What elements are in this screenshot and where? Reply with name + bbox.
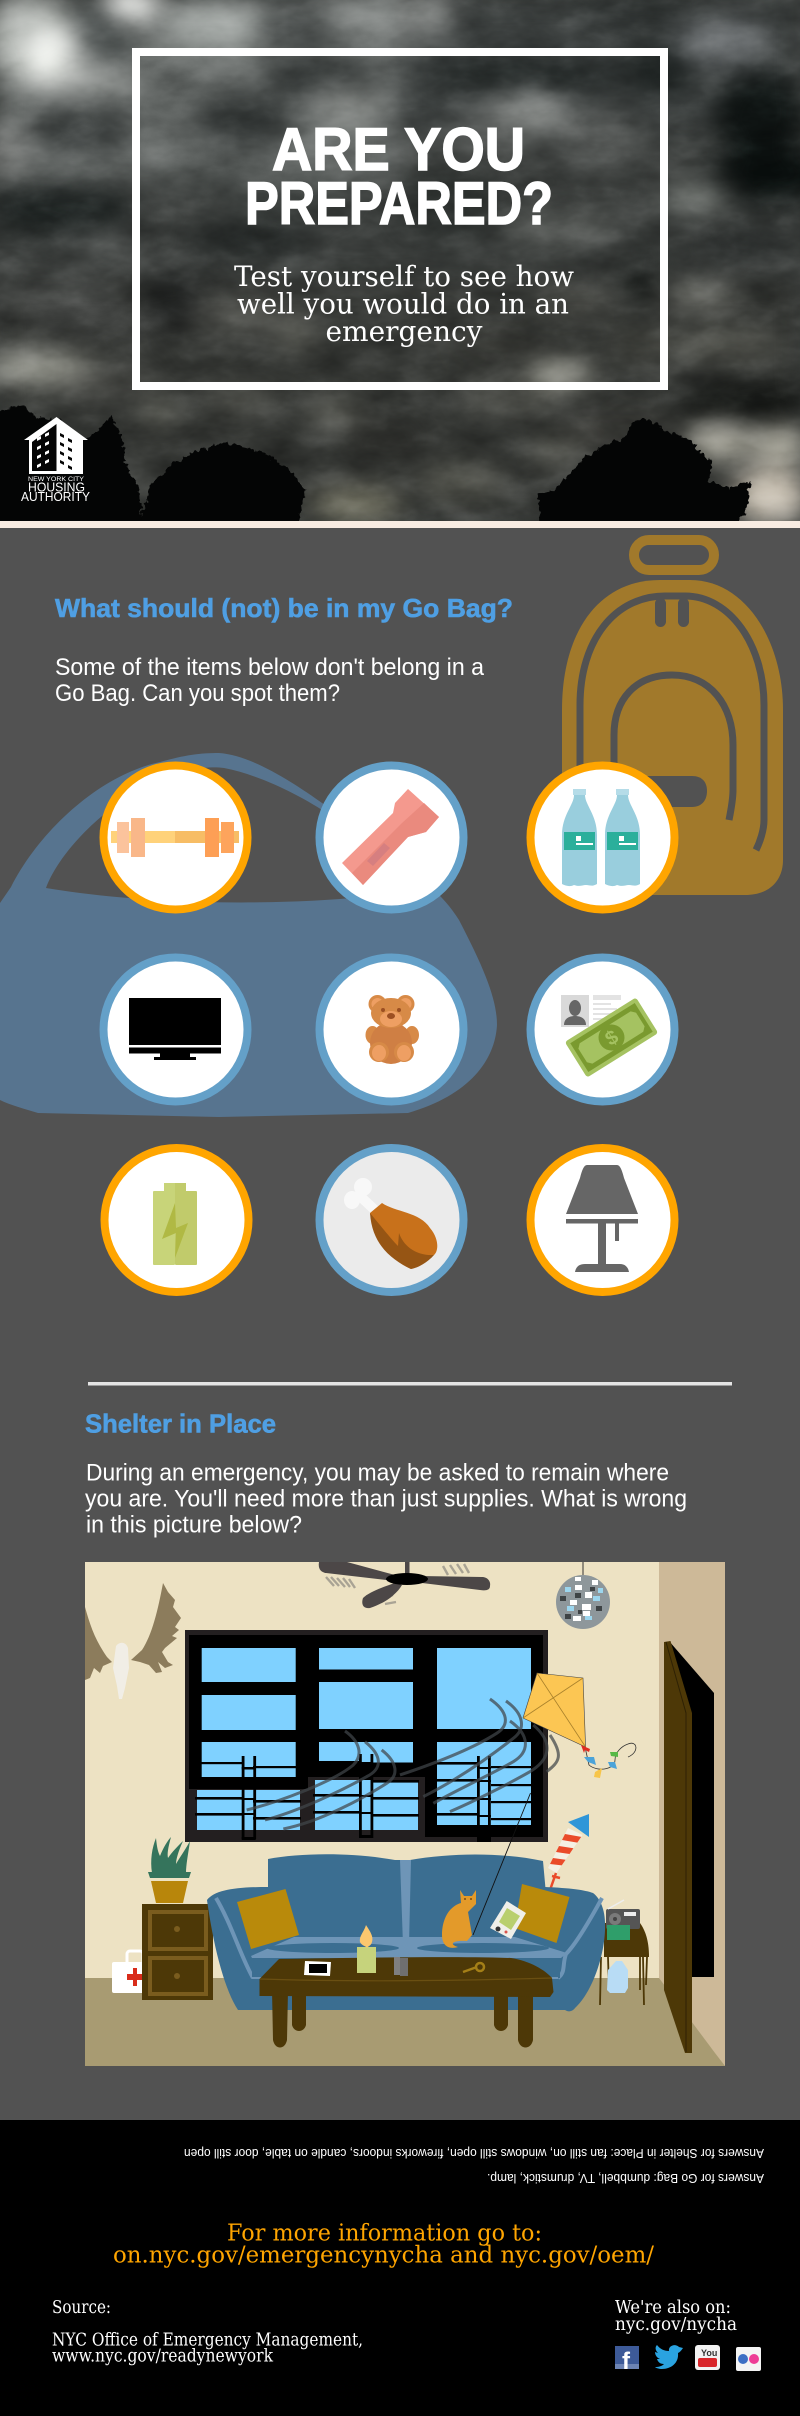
wind swirl lines <box>247 1699 558 1829</box>
subtitle <box>234 260 574 348</box>
source text: NYC Office of Emergency Management, <box>52 2331 363 2351</box>
go bag intro text: Go Bag. Can you spot them? <box>55 680 340 707</box>
logo: housing authority: AUTHORITY <box>21 489 90 504</box>
source text: Source: <box>52 2298 111 2318</box>
icon: facebook: f <box>622 2348 631 2375</box>
icon: youtube: You <box>701 2348 717 2358</box>
drawer cabinet <box>142 1904 213 2000</box>
string to window <box>473 1793 530 1935</box>
footer background <box>0 2120 800 2416</box>
first aid kit <box>112 1951 144 1993</box>
item: battery <box>104 1148 248 1292</box>
fire escape bars <box>195 1754 531 1842</box>
item: tv <box>104 958 248 1102</box>
logo: housing authority <box>21 417 90 504</box>
logo: housing authority: NEW YORK CITY <box>28 477 84 483</box>
hero frame <box>136 52 664 386</box>
coffee table with items <box>260 1925 554 2048</box>
shelter intro text: you are. You'll need more than just supplies. What is wrong <box>85 1486 687 1513</box>
upside-down answers: Answers for Go Bag: dumbbell, TV, drumstick, lamp. <box>487 2171 764 2185</box>
room walls and floor <box>85 1562 725 2066</box>
item: id and cash: $ <box>601 1026 623 1051</box>
go bag intro text <box>55 654 485 707</box>
moose skull trophy <box>85 1583 181 1699</box>
icon: facebook <box>615 2346 639 2375</box>
room scene <box>85 1562 725 2066</box>
item: teddy bear <box>320 958 464 1102</box>
cat <box>442 1890 476 1948</box>
more information callout: For more information go to: <box>227 2221 542 2247</box>
item: flashlight <box>320 766 464 910</box>
open door <box>664 1641 714 2053</box>
social text: nyc.gov/nycha <box>615 2315 737 2335</box>
title: PREPARED? <box>245 170 553 237</box>
potted plant <box>148 1837 191 1903</box>
tree silhouettes <box>0 406 750 530</box>
social text: We're also on: <box>615 2298 731 2318</box>
logo: housing authority: HOUSING <box>28 480 85 494</box>
item: dumbbell <box>104 766 248 910</box>
source text: www.nyc.gov/readynewyork <box>52 2347 273 2367</box>
hero: storm cloud photo <box>0 0 800 530</box>
item: drumstick <box>320 1148 464 1292</box>
more information callout <box>113 2221 654 2269</box>
sofa <box>207 1854 605 2011</box>
subtitle: Test yourself to see how <box>234 260 574 293</box>
source text <box>52 2298 363 2367</box>
icon: flickr <box>736 2347 761 2371</box>
item: id and cash <box>530 958 674 1102</box>
title: ARE YOU <box>272 116 525 183</box>
icon: twitter <box>655 2345 683 2369</box>
upside-down answers <box>184 2146 764 2185</box>
section divider <box>88 1382 732 1386</box>
item: water bottles <box>530 766 674 910</box>
item: lamp <box>530 1148 674 1292</box>
side table with radio and jug <box>600 1900 649 2005</box>
ceiling fan <box>319 1562 490 1608</box>
backpack illustration <box>562 540 783 895</box>
shelter intro text <box>85 1460 687 1539</box>
subtitle: well you would do in an <box>237 288 569 320</box>
kite <box>523 1673 636 1778</box>
firework rocket <box>548 1814 589 1890</box>
social text <box>615 2298 737 2335</box>
duffel bag illustration <box>0 753 497 1117</box>
window with fire escape <box>185 1630 548 1842</box>
shelter intro text: During an emergency, you may be asked to remain where <box>86 1460 669 1487</box>
upside-down answers: Answers for Shelter in Place: fan still on, windows still open, fireworks indoors, candle on table, door still open <box>184 2146 764 2160</box>
title <box>245 116 553 237</box>
subtitle: emergency <box>326 315 483 348</box>
disco ball <box>556 1562 610 1629</box>
shelter intro text: in this picture below? <box>86 1512 302 1539</box>
heading: go bag: What should (not) be in my Go Bag? <box>55 593 513 623</box>
handheld game console <box>490 1901 526 1939</box>
cream stripe under hero <box>0 521 800 528</box>
go bag intro text: Some of the items below don't belong in a <box>55 654 485 681</box>
more information callout: on.nyc.gov/emergencynycha and nyc.gov/oem/ <box>113 2243 654 2269</box>
icon: youtube <box>695 2345 720 2370</box>
heading: shelter in place: Shelter in Place <box>85 1409 276 1439</box>
